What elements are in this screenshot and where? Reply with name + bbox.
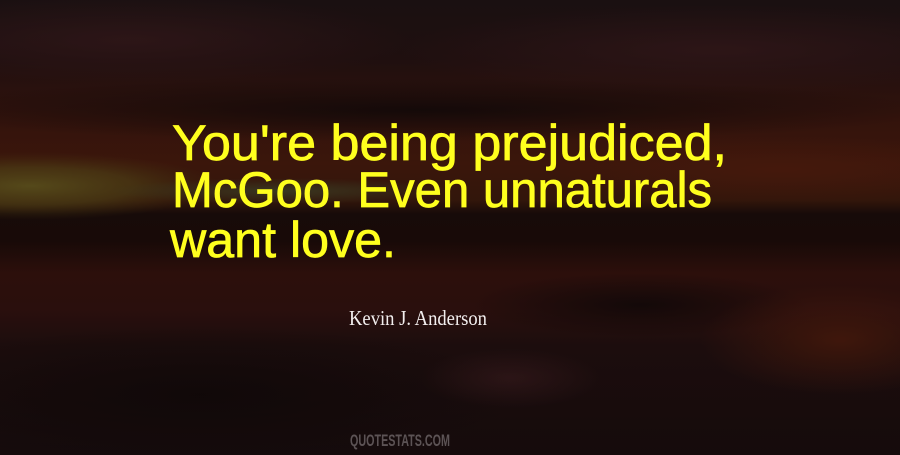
quote text: McGoo. Even unnaturals [172, 162, 712, 218]
quote text: You're being prejudiced, [172, 115, 727, 171]
author name: Kevin J. Anderson [349, 306, 487, 330]
quote text [169, 115, 727, 268]
watermark: QUOTESTATS.COM [350, 431, 450, 450]
quote text: want love. [169, 212, 396, 268]
